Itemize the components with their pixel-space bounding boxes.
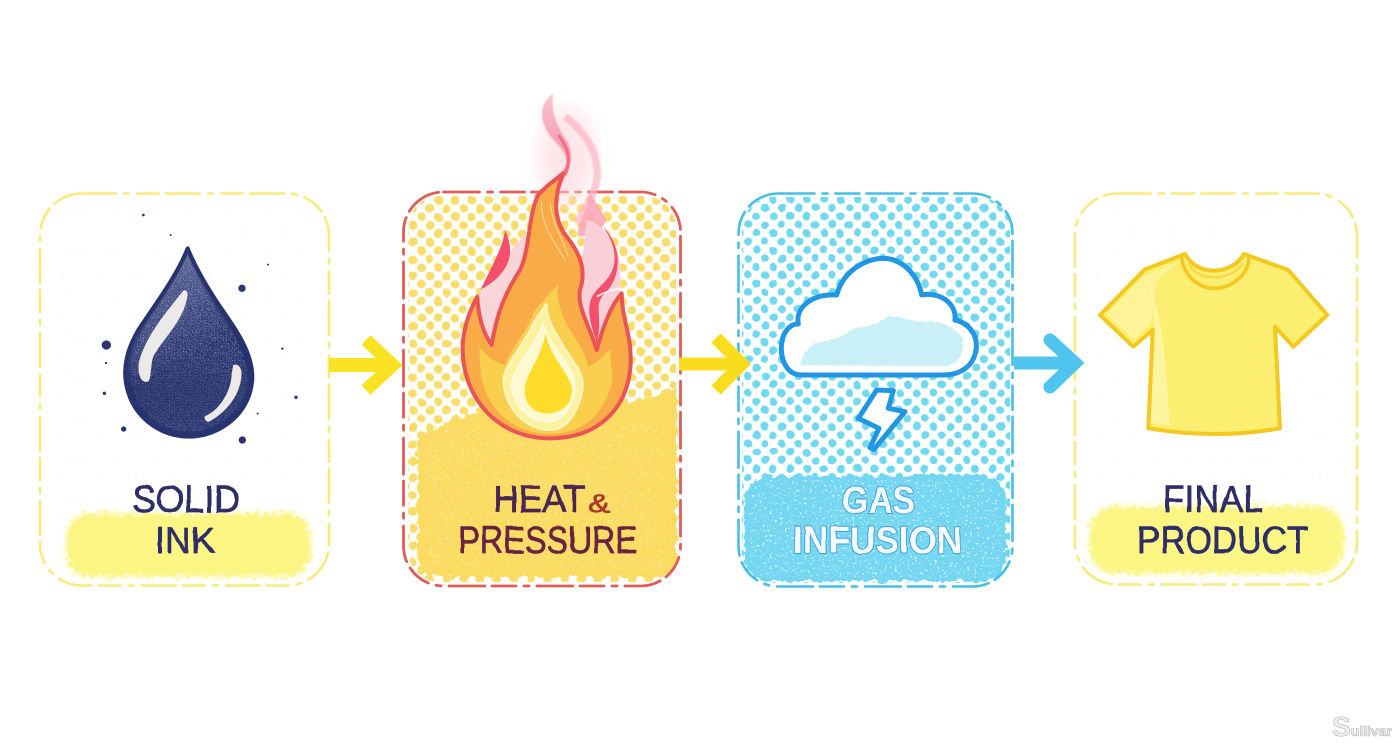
label: heat and pressure <box>458 479 637 562</box>
panel: gas infusion <box>738 194 1012 586</box>
icon: t-shirt <box>1100 254 1327 434</box>
icon: cloud and lightning bolt <box>781 258 976 449</box>
icon: flame <box>463 93 631 438</box>
arrow: heat to gas infusion <box>679 338 742 390</box>
label swatch: solid ink <box>66 513 311 577</box>
label swatch: heat and pressure <box>417 388 677 577</box>
label: gas infusion: GAS <box>842 480 915 522</box>
arrow: solid ink to heat <box>329 340 393 390</box>
label: solid ink <box>132 479 240 561</box>
label: solid ink: INK <box>155 520 215 561</box>
panel: solid ink <box>40 194 329 586</box>
label: final product <box>1137 479 1308 562</box>
icon: ink drop with droplets <box>102 214 298 444</box>
label: final product: PRODUCT <box>1137 520 1308 562</box>
label: gas infusion <box>793 480 962 562</box>
label: heat and pressure: HEAT <box>493 479 585 521</box>
arrow: gas infusion to final product <box>1014 340 1075 387</box>
label: gas infusion: INFUSION <box>793 520 962 562</box>
label swatch: final product <box>1089 506 1344 574</box>
panel: heat and pressure <box>404 93 680 586</box>
label swatch: gas infusion <box>745 476 1006 581</box>
label: heat and pressure: PRESSURE <box>458 520 637 562</box>
panel: final product <box>1075 194 1357 584</box>
label: final product: FINAL <box>1163 479 1263 521</box>
label: heat and pressure: & <box>588 488 610 518</box>
label: solid ink: SOLID <box>132 479 240 521</box>
